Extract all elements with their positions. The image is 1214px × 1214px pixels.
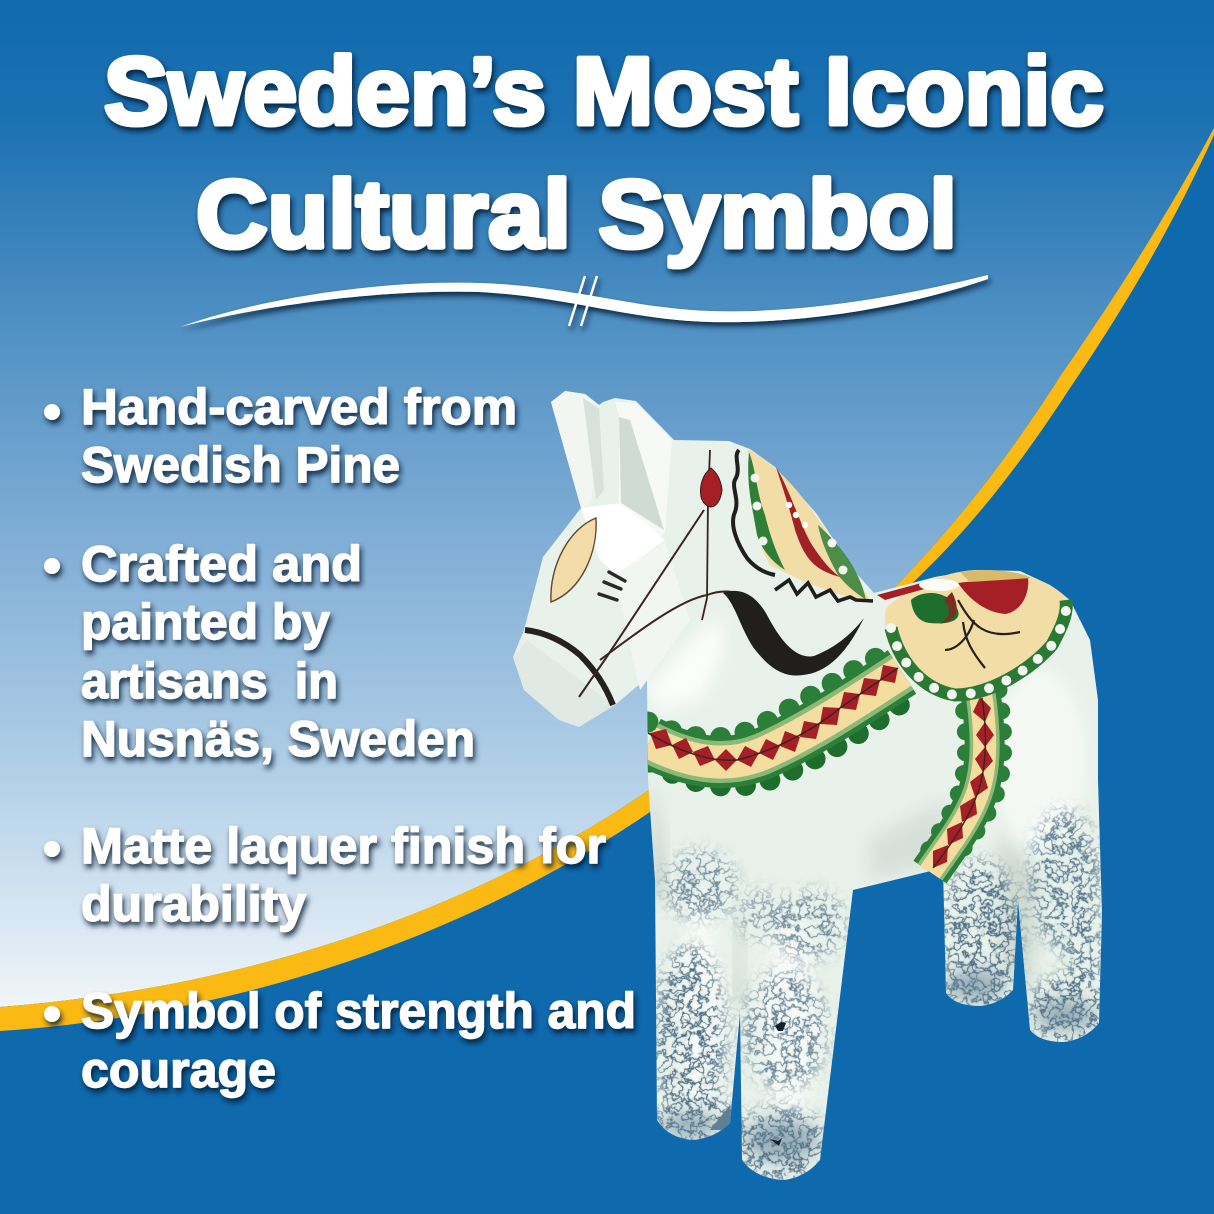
title [104, 38, 1104, 268]
bullet list [44, 379, 636, 1098]
bullet: crafted and painted: artisans in [81, 653, 338, 709]
horse body [513, 391, 1102, 1180]
bullet: hand-carved: Hand-carved from [81, 379, 517, 435]
yellow curved accent [0, 128, 1214, 1031]
bullet: hand-carved [44, 379, 517, 493]
bullet: hand-carved: Swedish Pine [81, 437, 400, 493]
horse shading [645, 615, 1085, 1130]
bullet: symbol of strength [44, 983, 636, 1098]
red forehead ornament [700, 468, 722, 507]
bullet: matte finish [44, 818, 606, 932]
neck black swoosh [723, 591, 864, 675]
bullet: crafted and painted: painted by [81, 594, 330, 650]
dala horse illustration [513, 391, 1112, 1183]
painted eye [551, 518, 596, 602]
title: Cultural Symbol [196, 161, 957, 268]
bullet: crafted and painted: Nusnäs, Sweden [81, 711, 475, 767]
bridle lines [525, 450, 745, 705]
neck garland [648, 650, 912, 786]
bullet: matte finish: Matte laquer finish for [81, 818, 606, 874]
bullet: crafted and painted: Crafted and [81, 536, 362, 592]
bullet: symbol of strength: courage [81, 1042, 276, 1098]
title: Sweden’s Most Iconic [104, 38, 1104, 145]
bullet: matte finish: durability [81, 876, 306, 932]
ears and face planes [513, 391, 690, 727]
title swoosh underline [180, 275, 988, 327]
chest strap [920, 690, 1004, 874]
mottled weathering on legs [653, 810, 1112, 1183]
bullet: symbol of strength: Symbol of strength and [81, 983, 636, 1039]
nostril dashes [599, 572, 625, 600]
saddle blanket [877, 570, 1069, 696]
mane decoration [733, 449, 873, 601]
bullet: crafted and painted [44, 536, 475, 767]
